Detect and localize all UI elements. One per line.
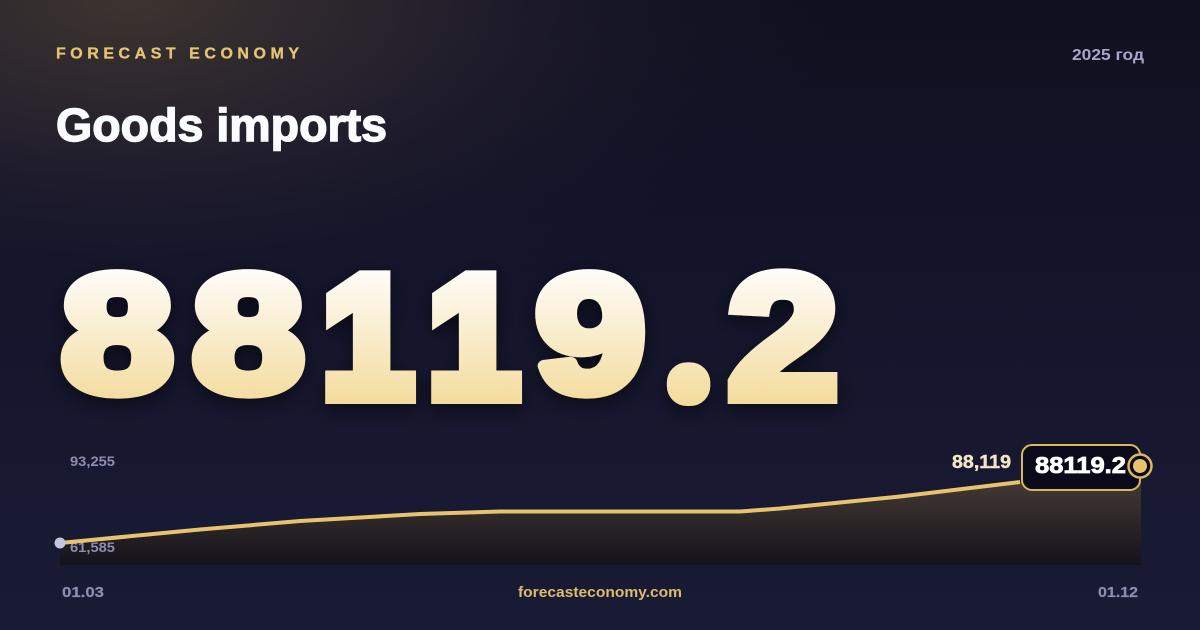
trend line [60,482,1020,543]
big value: 2 [728,239,839,436]
value callout [1022,445,1140,490]
title: Goods imports [56,99,387,151]
end date: 01.12 [1098,584,1138,601]
big value: 8 [62,241,173,427]
y axis max: 93,255 [70,453,115,469]
chart [54,445,1152,565]
big value: 9 [536,241,645,426]
value callout: 88119.2 [1035,452,1126,478]
y axis min: 61,585 [70,539,115,555]
last value label: 88,119 [952,452,1011,472]
start date: 01.03 [62,584,104,601]
big value: 1 [323,242,413,433]
big value: 8 [192,241,304,427]
start point [54,538,66,548]
big value: 1 [429,242,519,433]
big value [62,239,839,436]
year label: 2025 год [1072,47,1144,64]
website: forecasteconomy.com [518,585,682,601]
big value: . [685,365,692,392]
brand label: FORECAST ECONOMY [56,46,299,62]
area fill [60,466,1141,565]
end marker [1128,454,1152,478]
